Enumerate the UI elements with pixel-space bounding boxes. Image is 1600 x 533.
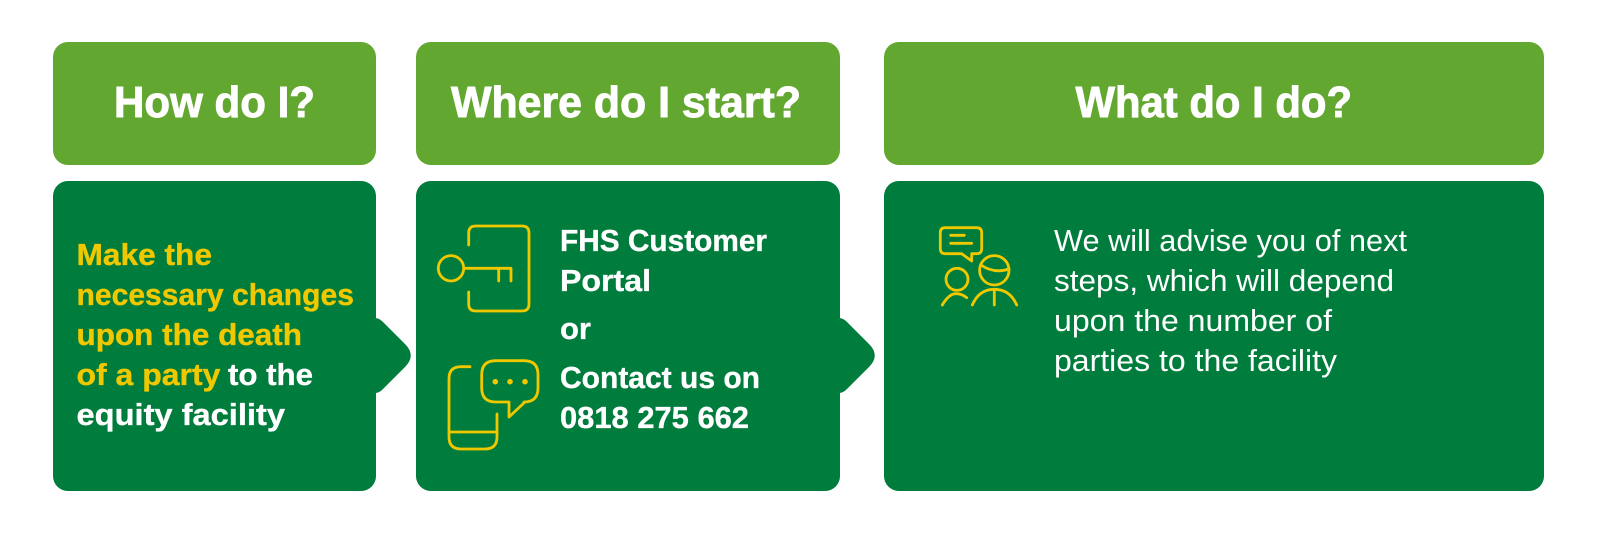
text: customer portal and contact details (560, 223, 767, 435)
text: customer portal and contact details: Contact us on (560, 360, 760, 395)
heading: What do I do? (884, 42, 1544, 165)
icon: key and door (438, 226, 529, 311)
panel: what do I do (884, 181, 1544, 491)
text: customer portal and contact details: 0818 275 662 (560, 400, 749, 435)
text: make the necessary changes: necessary changes (76, 277, 354, 312)
heading: How do I?: How do I? (114, 78, 315, 127)
text: make the necessary changes (76, 237, 354, 432)
text: customer portal and contact details: Portal (560, 263, 651, 298)
text: next steps advice: steps, which will depend (1054, 264, 1394, 298)
text: make the necessary changes: Make the (76, 237, 212, 272)
panel: where do I start (416, 181, 875, 491)
text: next steps advice: parties to the facility (1054, 344, 1338, 378)
text: next steps advice (1054, 224, 1408, 378)
text: make the necessary changes: upon the death (76, 317, 302, 352)
heading: How do I? (53, 42, 376, 165)
text: next steps advice: We will advise you of next (1054, 224, 1408, 258)
text: customer portal and contact details: FHS Customer (560, 223, 767, 258)
arrow: second to third panel (839, 318, 875, 393)
text: next steps advice: upon the number of (1054, 304, 1333, 338)
icon: two people talking (940, 228, 1017, 305)
heading: What do I do?: What do I do? (1076, 78, 1352, 127)
text: make the necessary changes: to the (228, 357, 313, 392)
heading: Where do I start? (416, 42, 840, 165)
panel: how do I (53, 181, 411, 491)
text: customer portal and contact details: or (560, 311, 591, 346)
text: make the necessary changes: of a party (76, 357, 221, 392)
heading: Where do I start?: Where do I start? (451, 78, 801, 127)
arrow: first to second panel (375, 318, 411, 393)
icon: phone with speech bubble (449, 361, 538, 449)
text: make the necessary changes: equity facility (76, 397, 286, 432)
